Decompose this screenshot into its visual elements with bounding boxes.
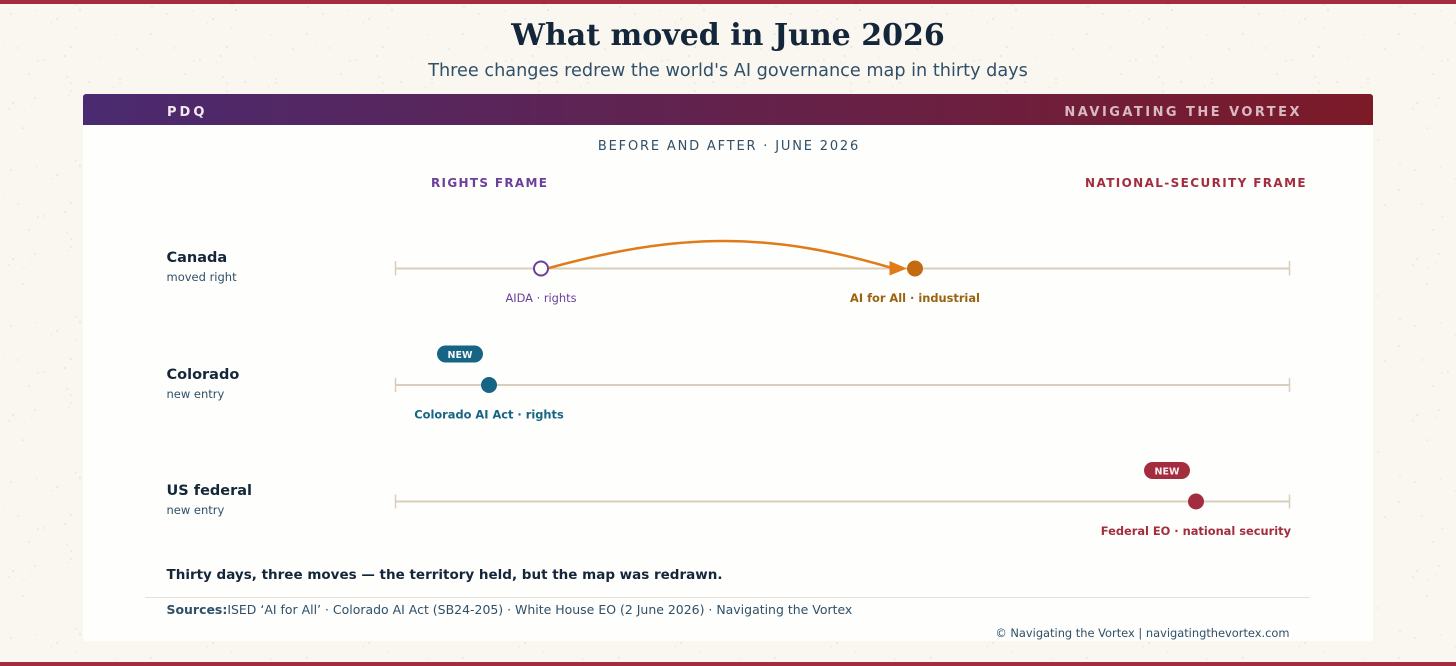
- marker: AIDA: [534, 262, 548, 276]
- chart heading: BEFORE AND AFTER · JUNE 2026: [598, 139, 860, 154]
- row label: US federal: [166, 483, 252, 517]
- panel: card: [83, 94, 1373, 641]
- badge: Colorado new: [437, 346, 483, 362]
- takeaway: Thirty days, three moves — the territory held, but the map was redrawn.: [166, 567, 722, 583]
- copyright: © Navigating the Vortex | navigatingthevortex.com: [995, 626, 1290, 640]
- row label: Canada: Canada: [166, 250, 227, 266]
- title: What moved in June 2026: [511, 18, 945, 53]
- axis label: rights frame: RIGHTS FRAME: [431, 176, 548, 190]
- bottom accent bar: [0, 662, 1456, 666]
- track: US federal: [395, 494, 1290, 508]
- track: Canada: [395, 261, 1290, 276]
- row label: Canada: [166, 250, 237, 284]
- label: Colorado AI Act: Colorado AI Act · rights: [414, 408, 564, 422]
- subtitle: Three changes redrew the world's AI governance map in thirty days: [428, 61, 1028, 81]
- row label: US federal: US federal: [166, 483, 252, 499]
- badge: US federal new: NEW: [1155, 466, 1180, 478]
- axis label: national-security frame: NATIONAL-SECURITY FRAME: [1085, 176, 1307, 190]
- brand label: PDQ: [167, 105, 207, 120]
- row label: Colorado: Colorado: [166, 367, 239, 383]
- top accent bar: [0, 0, 1456, 4]
- row label: Canada: moved right: [166, 270, 237, 284]
- row label: Colorado: [166, 367, 239, 401]
- marker: Colorado AI Act: [481, 377, 497, 393]
- footer divider: [145, 597, 1310, 598]
- arrow: Canada shift: [549, 241, 907, 276]
- marker: AI for All: [907, 260, 923, 276]
- series label: NAVIGATING THE VORTEX: [1064, 105, 1302, 120]
- row label: Colorado: new entry: [166, 387, 224, 401]
- badge: US federal new: [1144, 462, 1190, 479]
- row label: US federal: new entry: [166, 503, 224, 517]
- header band: [83, 94, 1373, 125]
- badge: Colorado new: NEW: [448, 350, 473, 361]
- marker: Federal EO: [1188, 494, 1204, 510]
- track: Colorado: [395, 378, 1290, 392]
- sources: Sources:ISED ‘AI for All’ · Colorado AI Act (SB24-205) · White House EO (2 June 2026) · Navigating the Vortex: [166, 602, 852, 617]
- label: Federal EO: Federal EO · national security: [1101, 524, 1292, 538]
- label: AI for All: AI for All · industrial: [850, 291, 980, 305]
- label: AIDA: AIDA · rights: [505, 291, 577, 305]
